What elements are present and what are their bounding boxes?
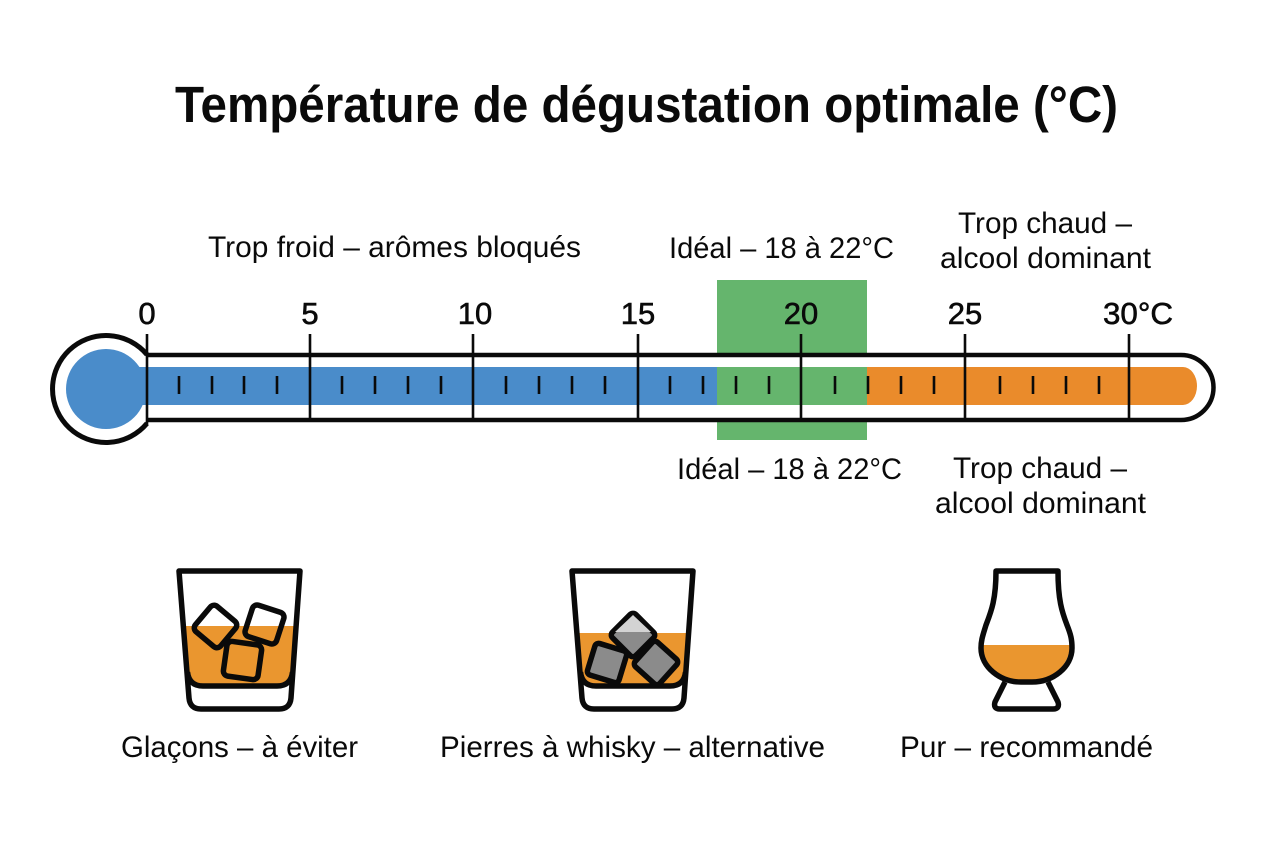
label: ice: Glaçons – à éviter [121,731,358,764]
label: stones: Pierres à whisky – alternative [440,731,825,764]
label: too hot top [940,207,1151,275]
label: too hot bottom: Trop chaud – [953,452,1128,485]
label: too hot bottom [935,452,1146,520]
scale numbers [138,296,1173,331]
scale numbers: 0 [138,296,156,331]
scale numbers: 5 [301,296,319,331]
whisky stones [586,612,679,686]
label: neat: Pur – recommandé [900,731,1153,764]
icon: tasting glass [981,571,1072,709]
tube outline [147,355,1214,420]
label: too hot top: alcool dominant [940,242,1151,275]
minor ticks [179,376,1099,394]
scale numbers: 25 [948,296,982,331]
icon: glass with ice cubes [179,571,300,709]
ideal zone band [717,280,867,440]
scale numbers: 15 [621,296,655,331]
label: ideal bottom: Idéal – 18 à 22°C [677,453,902,486]
cold segment [130,367,717,405]
label: too hot bottom: alcool dominant [935,487,1146,520]
label: ideal top: Idéal – 18 à 22°C [669,232,894,265]
ideal segment [717,367,867,405]
major ticks [147,334,1129,424]
hot segment [867,367,1197,405]
scale numbers: 10 [458,296,492,331]
scale numbers: 30°C [1103,296,1173,331]
label: too hot top: Trop chaud – [958,207,1133,240]
icon: glass with whisky stones [572,571,693,709]
title: Température de dégustation optimale (°C) [175,76,1118,133]
label: too cold: Trop froid – arômes bloqués [208,231,581,264]
thermometer [53,280,1213,442]
scale numbers: 20 [784,296,818,331]
tube interior [147,355,1214,420]
bulb [53,336,147,442]
